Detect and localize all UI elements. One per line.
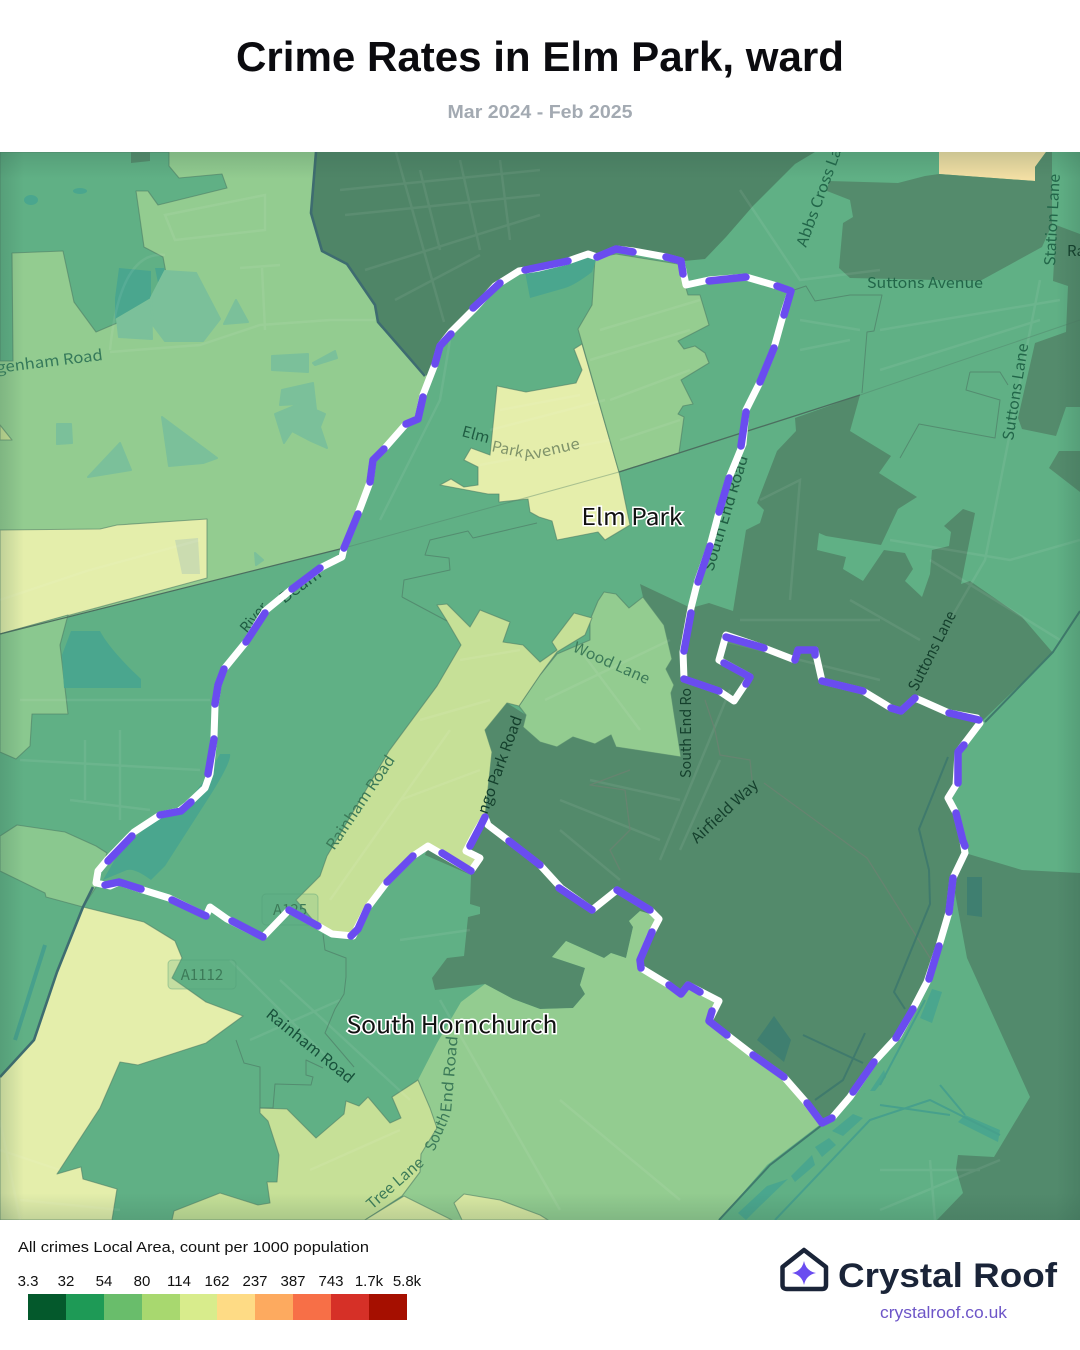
boundary white base (96, 249, 980, 1123)
road labels: Park (490, 435, 526, 463)
region: Elm Park pale yellow (440, 344, 630, 540)
legend tick labels (18, 1273, 422, 1290)
region: south-east dark (937, 853, 1080, 1220)
region: south pale patch east (454, 1194, 548, 1220)
region: far north-west green (0, 152, 227, 361)
channels and outlines (0, 152, 1080, 1220)
road labels: South End Ro (675, 688, 696, 778)
road badge: A125 (262, 894, 318, 925)
region: west outside light (0, 615, 68, 759)
legend tick labels: 1.7k (355, 1273, 384, 1290)
legend tick labels: 237 (242, 1273, 268, 1290)
region: small yellow triangle (0, 425, 12, 440)
legend tick labels: 80 (134, 1273, 150, 1290)
region: dark east strip (1018, 225, 1080, 436)
road labels: Tree Lane (362, 1152, 428, 1214)
region: south yellow-green (172, 1080, 437, 1220)
region: pale yellow west (0, 519, 207, 634)
region: pale yellow south-west (0, 907, 243, 1220)
legend colour scale (28, 1294, 407, 1320)
choropleth map (0, 145, 1080, 1220)
road labels: River (235, 598, 273, 637)
road labels: Suttons Lane (997, 342, 1033, 442)
ward boundary (96, 249, 980, 1123)
legend tick labels: 743 (318, 1273, 344, 1290)
road labels: Abbs Cross La (791, 145, 846, 250)
region: Wood Lane light green (519, 592, 681, 757)
legend tick labels: 162 (204, 1273, 230, 1290)
place label: Elm Park: Elm Park (582, 498, 683, 532)
region: central yellow-green (296, 604, 592, 936)
region: dark Airfield and South (425, 395, 1053, 1123)
road network (0, 152, 1080, 1220)
region: dark east patch (1049, 451, 1080, 492)
region: south pale patch (365, 1196, 452, 1220)
region: dark north (311, 152, 815, 376)
icon: house with star (782, 1250, 826, 1289)
road labels: Station Lane (1039, 173, 1065, 266)
region: north light green (578, 254, 709, 472)
road labels: South End Road (698, 453, 753, 573)
legend tick labels: 32 (58, 1273, 74, 1290)
legend tick labels: 3.3 (18, 1273, 38, 1290)
region: dark north-east block (827, 152, 1052, 281)
road labels: Rainham Road (321, 751, 400, 854)
place label: South Hornchurch: South Hornchurch (346, 1006, 558, 1040)
title: Crime Rates in Elm Park, ward (236, 33, 844, 80)
road badge: A1112: A1112 (181, 964, 223, 985)
pond in dark area (757, 1016, 791, 1062)
legend tick labels: 5.8k (393, 1273, 422, 1290)
region: north-west light green (0, 152, 427, 634)
road labels: Beam (275, 563, 326, 608)
road labels: Suttons Lane (903, 607, 961, 694)
subtitle: date range: Mar 2024 - Feb 2025 (448, 102, 632, 122)
region: small dark tile (131, 152, 150, 163)
legend tick labels: 114 (167, 1273, 191, 1290)
road labels: Airfield Way (686, 774, 763, 848)
vignette (0, 152, 1080, 1220)
road badge: A1112 (168, 960, 236, 989)
road labels: ngo Park Road (472, 713, 527, 817)
region: south-west light (0, 825, 107, 907)
legend tick labels: 54 (96, 1273, 112, 1290)
road badge: A125: A125 (273, 899, 307, 920)
road labels: Elm (460, 421, 492, 448)
road labels: Avenue (521, 433, 582, 466)
logo: Crystal Roof (782, 1250, 1058, 1322)
legend title: All crimes Local Area, count per 1000 population (18, 1239, 369, 1256)
region: peach north-east (939, 152, 1046, 181)
website url: crystalroof.co.uk (880, 1304, 1008, 1322)
road labels: End Road (435, 1035, 463, 1113)
road labels: Suttons Avenue (867, 272, 983, 293)
park patch in pale area (175, 538, 200, 574)
road labels: South (419, 1109, 455, 1154)
choropleth regions (0, 152, 1080, 1220)
region: south light green (402, 911, 822, 1220)
water features (24, 188, 1000, 1220)
wordmark: Crystal Roof (838, 1257, 1058, 1295)
boundary purple dashes (105, 249, 979, 1123)
road labels: Rainham Road (262, 1004, 359, 1088)
lakes in open land (57, 271, 337, 565)
legend tick labels: 387 (280, 1273, 306, 1290)
legend (18, 1239, 422, 1320)
road labels (0, 145, 1080, 1214)
road labels: Wood Lane (570, 636, 653, 689)
south-east dark pond (967, 877, 982, 917)
